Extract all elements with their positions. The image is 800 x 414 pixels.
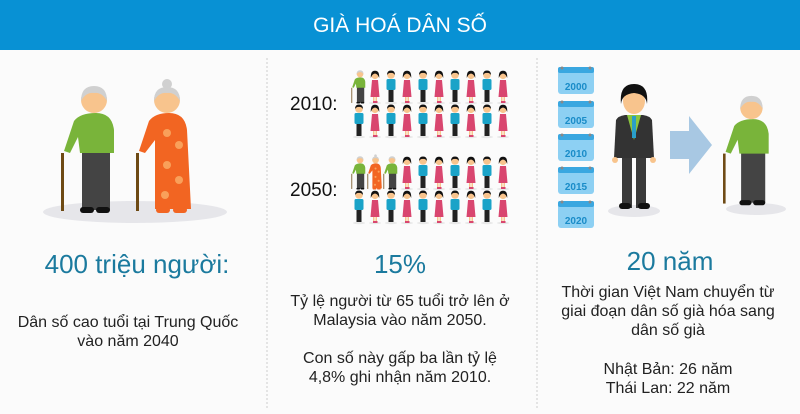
arrow [670,116,712,174]
calendars: 2005 [565,116,588,127]
figure: old man [723,96,786,215]
panel: China [18,79,238,350]
label 2050: 2050: [290,180,338,201]
title: GIÀ HOÁ DÂN SỐ [313,13,487,37]
calendars: 2010 [565,149,588,160]
calendars: 2020 [565,216,588,227]
text: Vietnam description: dân số già [631,322,705,339]
text: China description: Dân số cao tuổi tại Trung Quốc [18,313,238,331]
text: China description: vào năm 2040 [77,333,179,350]
calendars: 2000 [565,82,588,93]
text: Malaysia description: Malaysia vào năm 2050. [313,312,487,329]
pictogram 2050 [351,154,509,224]
figure: young man in suit [608,84,660,217]
text: Malaysia description: Con số này gấp ba lần tỷ lệ [303,350,497,367]
text: Vietnam description: Thời gian Việt Nam chuyển từ [561,283,775,301]
calendars [558,66,594,228]
text: Vietnam description: Nhật Bản: 26 năm [604,361,732,378]
text: Vietnam description: Thái Lan: 22 năm [606,380,730,397]
heading: 15%: 15% [374,249,426,279]
header bar [0,0,800,50]
calendars: 2015 [565,182,588,193]
heading: 400 triệu người: 400 triệu người: [45,249,229,279]
panel: Malaysia [290,70,510,386]
panel: Vietnam [558,66,786,397]
text: Vietnam description: giai đoạn dân số già hóa sang [561,303,775,320]
illustration: elderly couple [43,79,227,223]
text: Malaysia description: 4,8% ghi nhận năm 2010. [309,369,491,386]
label 2010: 2010: [290,94,338,115]
pictogram 2010 [351,70,509,138]
text: Malaysia description: Tỷ lệ người từ 65 tuổi trở lên ở [290,292,510,310]
heading: 20 năm: 20 năm [627,246,713,276]
